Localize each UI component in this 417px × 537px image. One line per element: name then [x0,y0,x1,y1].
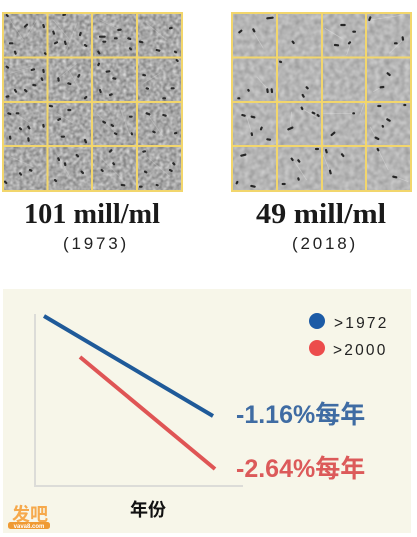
legend: >2000: >2000 [333,342,388,359]
legend: >1972 [309,313,389,332]
heading: 101 mill/ml: 101 mill/ml [24,199,160,230]
legend: >2000 [309,340,388,359]
line: >1972 trend [44,316,213,416]
x axis label: 年份 [130,499,166,520]
legend: >1972: >1972 [334,315,389,332]
panel: trend chart [3,289,411,533]
chart axes [35,314,243,486]
panel: 2018 sperm micrograph grid [231,12,412,192]
label: blue rate: -1.16%每年 [236,401,365,429]
logo: watermark [8,504,50,530]
panel: 1973 sperm micrograph grid [2,12,183,192]
heading: 49 mill/ml: 49 mill/ml [256,199,386,230]
line: >2000 trend [80,357,215,469]
logo: watermark: 发吧 [12,504,48,524]
label: year 2018: (2018) [292,234,358,253]
label: year 1973: (1973) [63,234,129,253]
label: red rate: -2.64%每年 [236,455,365,483]
logo: watermark: vava8.com [14,524,44,530]
